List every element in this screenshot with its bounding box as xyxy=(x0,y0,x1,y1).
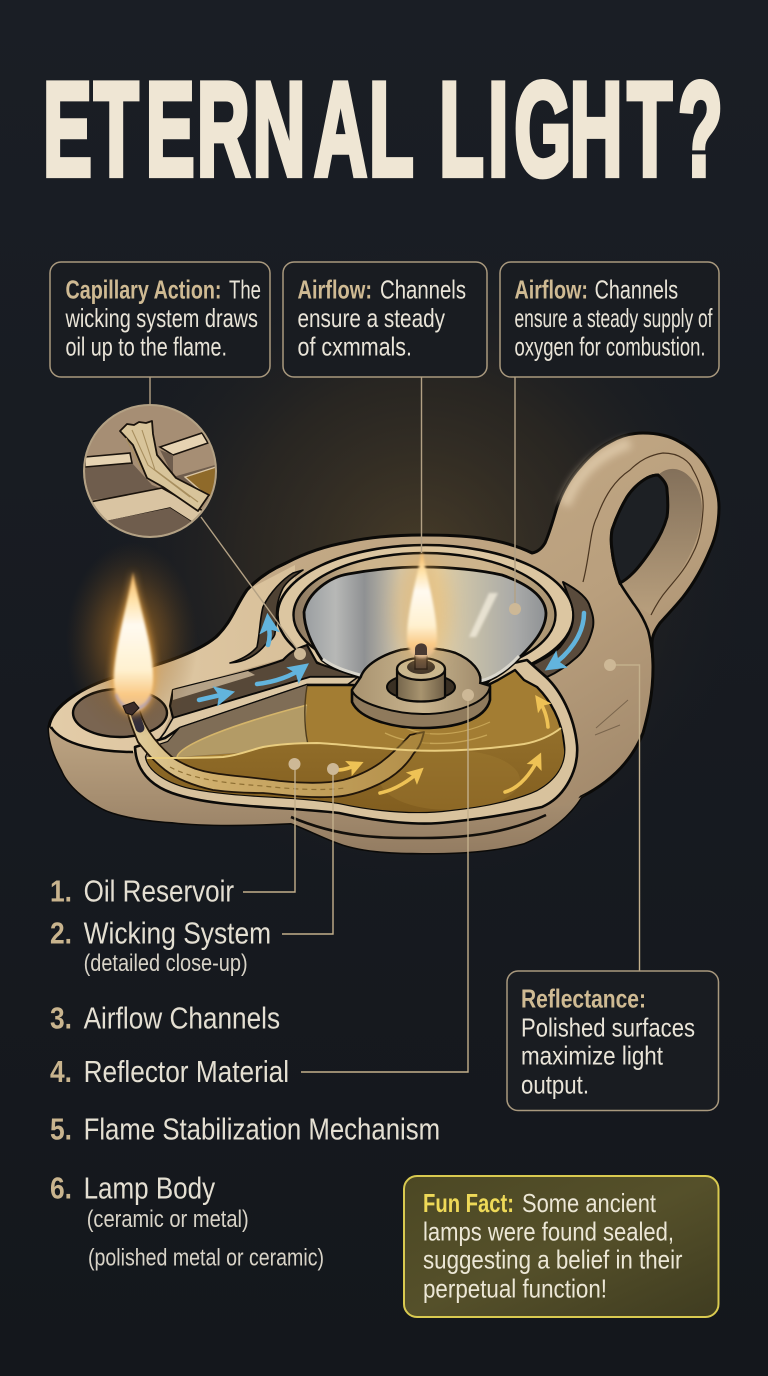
handle xyxy=(565,443,703,660)
yellow oil flow arrows xyxy=(337,699,548,793)
central flame xyxy=(394,550,450,666)
leader lines xyxy=(150,377,640,1072)
item 2: (detailed close-up) xyxy=(84,950,248,977)
detail inset: wick close-up xyxy=(80,405,220,545)
callout: airflow two: Channels xyxy=(595,274,678,304)
callout: reflectance: output. xyxy=(521,1070,589,1100)
item 4: Reflector Material xyxy=(84,1054,289,1089)
item 3: 3. xyxy=(50,1000,72,1036)
callout: capillary action: oil up to the flame. xyxy=(66,332,227,362)
callout: fun fact: suggesting a belief in their xyxy=(423,1244,683,1274)
title: ETERNAL LIGHT? xyxy=(43,55,723,204)
item 1: 1. xyxy=(50,874,72,908)
cutaway wall xyxy=(135,660,577,824)
oil cavity xyxy=(146,670,564,812)
callout: capillary action: Capillary Action: xyxy=(66,274,222,304)
item 6: 6. xyxy=(50,1170,72,1206)
callout: fun fact xyxy=(404,1176,718,1317)
callout: airflow one: Channels xyxy=(380,274,466,304)
callout: capillary action: The xyxy=(229,274,261,304)
item 2: 2. xyxy=(50,916,72,950)
spout top surface xyxy=(50,565,295,752)
callout: capillary action: wicking system draws xyxy=(65,303,258,333)
callout: reflectance: Polished surfaces xyxy=(521,1012,695,1042)
oil surface line xyxy=(147,728,561,758)
item 5: Flame Stabilization Mechanism xyxy=(84,1112,440,1146)
left flame xyxy=(66,542,198,738)
leader dots xyxy=(288,603,616,775)
callout: capillary action xyxy=(50,262,270,377)
body shading xyxy=(40,700,628,860)
callout: reflectance: Reflectance: xyxy=(521,984,646,1014)
callout: airflow one: ensure a steady xyxy=(298,303,445,333)
left well xyxy=(73,689,167,737)
item 4: 4. xyxy=(50,1054,72,1089)
callout: airflow one: of cxmmals. xyxy=(298,332,412,362)
callout: reflectance: maximize light xyxy=(521,1040,664,1070)
item 5: 5. xyxy=(50,1112,72,1146)
callout: reflectance xyxy=(507,971,718,1110)
callout: airflow one xyxy=(283,262,487,377)
item 6: Lamp Body xyxy=(84,1170,216,1206)
flame stabilizer platform xyxy=(352,643,490,728)
callout: fun fact: Some ancient xyxy=(522,1188,657,1218)
item 6 xyxy=(50,1170,324,1272)
callout: fun fact: perpetual function! xyxy=(423,1274,607,1304)
item 6: (polished metal or ceramic) xyxy=(88,1244,324,1272)
callout: fun fact: lamps were found sealed, xyxy=(423,1216,674,1246)
item 3: Airflow Channels xyxy=(84,1000,280,1036)
oil contents xyxy=(146,685,564,812)
item 1: Oil Reservoir xyxy=(84,874,234,908)
item 2 xyxy=(50,916,271,977)
oil lamp illustration xyxy=(40,433,719,860)
wick xyxy=(127,704,430,797)
rim rings xyxy=(278,545,574,685)
callout: fun fact: Fun Fact: xyxy=(423,1188,514,1218)
air channels xyxy=(170,645,358,718)
item 6: (ceramic or metal) xyxy=(87,1206,249,1233)
reflector bowl xyxy=(304,567,546,683)
callout: airflow two: Airflow: xyxy=(514,274,588,304)
lamp body xyxy=(49,433,719,853)
callout: airflow two xyxy=(500,262,719,377)
item 2: Wicking System xyxy=(84,916,271,950)
blue airflow arrows xyxy=(199,613,584,700)
callout: airflow one: Airflow: xyxy=(298,274,372,304)
numbered list of components xyxy=(50,874,440,1272)
